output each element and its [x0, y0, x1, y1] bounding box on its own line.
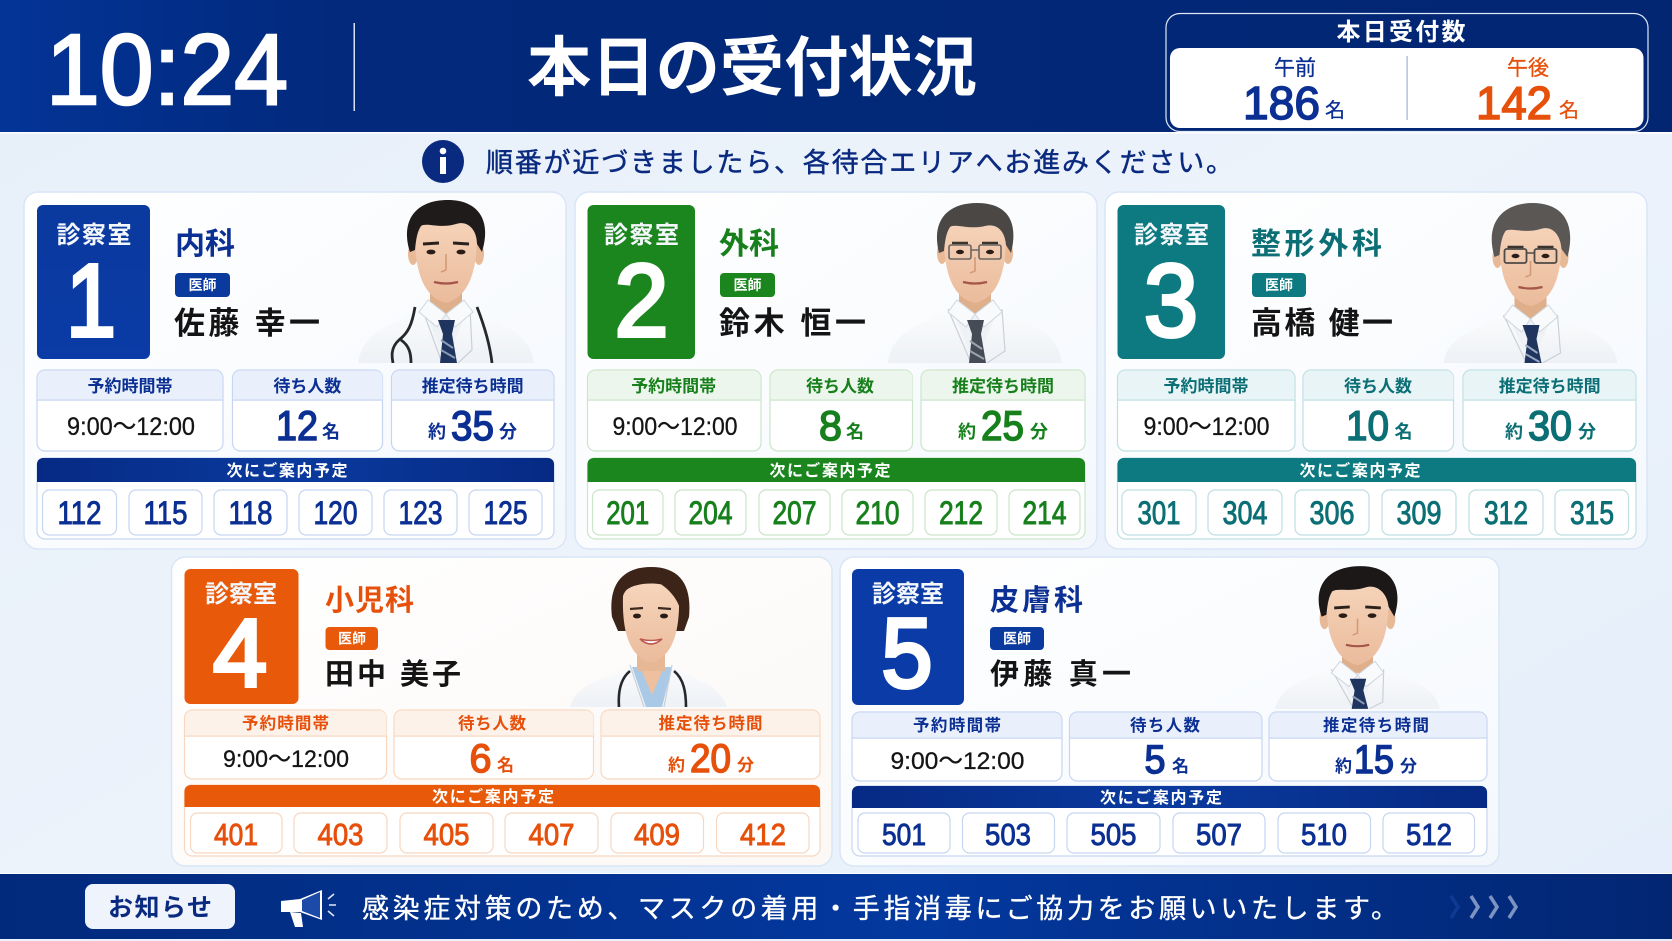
afternoon count: 142: [1476, 77, 1552, 129]
info cell: estimated wait: 分: [499, 422, 517, 442]
icon: information: [422, 140, 464, 183]
info cell: waiting people: 名: [322, 422, 340, 442]
summary heading: 本日受付数: [1336, 19, 1466, 46]
info cell: estimated wait: 約: [1505, 422, 1523, 442]
info cell: estimated wait: 推定待ち時間: [658, 714, 762, 733]
next patients: 407: [528, 817, 574, 852]
info cell: estimated wait: [601, 710, 820, 781]
next patients: 次にご案内予定: [226, 461, 348, 480]
doctor tag: 医師: [734, 277, 762, 293]
info cell: waiting people: 待ち人数: [458, 714, 526, 733]
next patients: [1118, 458, 1636, 539]
info cell: estimated wait: 推定待ち時間: [952, 377, 1054, 396]
info cell: waiting people: [232, 370, 382, 451]
panel: today's reception counts: [1166, 14, 1648, 132]
doctor name: 鈴木 恒一: [719, 306, 866, 341]
next patients: 207: [772, 495, 816, 531]
info cell: waiting people: [770, 370, 912, 451]
afternoon count: 午後: [1507, 57, 1549, 80]
info cell: estimated wait: 約: [668, 756, 685, 775]
info cell: booking time: [588, 370, 761, 451]
panel: room 3 orthopedics: [1105, 192, 1647, 549]
info cell: waiting people: 待ち人数: [1130, 716, 1200, 735]
info cell: waiting people: [1070, 712, 1262, 782]
next patients: [852, 786, 1487, 856]
next patients: [184, 785, 820, 856]
next patients: 304: [1222, 495, 1268, 531]
doctor portrait: [358, 200, 534, 363]
info cell: waiting people: [394, 710, 594, 781]
morning count: 午前: [1274, 57, 1316, 80]
next patients: 204: [688, 495, 732, 531]
info cell: estimated wait: 約: [428, 422, 446, 442]
info cell: estimated wait: 分: [1030, 422, 1048, 442]
clock: 10:24: [46, 14, 288, 126]
room badge: 5: [882, 598, 932, 708]
room badge: 4: [213, 600, 267, 707]
next patients: 120: [314, 495, 358, 531]
next patients: 312: [1484, 495, 1528, 531]
next patients: 214: [1022, 495, 1066, 531]
announcement button: [85, 884, 235, 929]
info cell: waiting people: 名: [497, 756, 514, 775]
next patients: 501: [882, 817, 926, 852]
next patients: 次にご案内予定: [770, 461, 890, 480]
next patients: 次にご案内予定: [1300, 461, 1420, 480]
info cell: booking time: 予約時間帯: [913, 716, 1001, 735]
next patients: 510: [1301, 817, 1347, 852]
info cell: waiting people: 10: [1346, 402, 1389, 449]
info cell: estimated wait: [1269, 712, 1487, 782]
info cell: waiting people: 待ち人数: [806, 377, 874, 396]
next patients: 412: [740, 817, 786, 852]
info cell: booking time: [852, 712, 1062, 781]
info cell: estimated wait: 推定待ち時間: [1323, 716, 1429, 735]
info cell: waiting people: 名: [846, 422, 864, 442]
panel: room 1 internal medicine: [24, 192, 566, 549]
info cell: booking time: 9:00～12:00: [890, 748, 1024, 775]
next patients: 512: [1406, 817, 1452, 852]
info cell: estimated wait: [392, 370, 554, 451]
next patients: 503: [985, 817, 1031, 852]
info cell: waiting people: 名: [1172, 757, 1189, 776]
info cell: estimated wait: 約: [958, 422, 976, 442]
room badge: 診察室: [604, 222, 679, 249]
doctor portrait: [570, 567, 727, 707]
room badge: 2: [614, 243, 668, 358]
morning count: [1243, 57, 1345, 129]
chevrons: [1451, 896, 1516, 918]
doctor name: 田中 美子: [325, 658, 461, 691]
next patients: 405: [424, 817, 470, 852]
doctor name: 伊藤 真一: [990, 658, 1131, 691]
next patients: 201: [606, 495, 649, 531]
department: 外科: [719, 228, 779, 261]
doctor portrait: [1444, 203, 1617, 363]
room badge: [184, 569, 298, 707]
notice text: 順番が近づきましたら、各待合エリアへお進みください。: [486, 148, 1233, 178]
doctor portrait: [1276, 566, 1440, 709]
summary white box: [1170, 48, 1644, 128]
panel: room 4 pediatrics: [172, 557, 832, 866]
icon: megaphone: [281, 890, 336, 927]
info cell: estimated wait: 20: [690, 737, 731, 781]
info cell: estimated wait: [921, 370, 1085, 451]
info cell: booking time: 9:00～12:00: [67, 413, 195, 441]
info cell: booking time: 予約時間帯: [1164, 377, 1248, 396]
doctor tag: [1252, 273, 1306, 297]
info cell: estimated wait: 分: [737, 756, 754, 775]
doctor tag: 医師: [1265, 277, 1293, 293]
announcement button: お知らせ: [108, 894, 212, 922]
department: 内科: [175, 228, 235, 261]
morning count: 186: [1243, 77, 1320, 129]
header band: [0, 0, 1672, 134]
room badge: 診察室: [872, 581, 944, 608]
info cell: booking time: [37, 370, 223, 451]
doctor tag: [990, 627, 1044, 650]
next patients: 507: [1196, 817, 1242, 852]
next patients: 次にご案内予定: [1100, 788, 1222, 807]
doctor tag: 医師: [1003, 630, 1031, 646]
info cell: estimated wait: 分: [1400, 757, 1417, 776]
next patients: 118: [228, 495, 272, 531]
department: 小児科: [325, 584, 414, 617]
info cell: booking time: [184, 710, 386, 779]
info cell: waiting people: [1303, 370, 1454, 451]
info cell: estimated wait: 35: [451, 402, 494, 449]
doctor tag: [720, 273, 775, 297]
afternoon count: 名: [1559, 99, 1579, 122]
next patients: 301: [1138, 495, 1180, 531]
info cell: waiting people: 待ち人数: [1344, 377, 1412, 396]
room badge: 診察室: [1134, 222, 1209, 249]
info cell: estimated wait: 30: [1528, 402, 1572, 449]
next patients: 125: [484, 495, 528, 531]
info cell: waiting people: 6: [470, 737, 492, 781]
info cell: waiting people: 待ち人数: [273, 377, 341, 396]
morning count: 名: [1325, 99, 1345, 122]
info cell: estimated wait: 25: [981, 402, 1024, 449]
next patients: 123: [398, 495, 442, 531]
room badge: 診察室: [205, 581, 277, 608]
panel: room 2 surgery: [575, 192, 1097, 549]
info cell: waiting people: 12: [276, 402, 318, 449]
info cell: booking time: [1118, 370, 1295, 451]
doctor name: 佐藤 幸一: [174, 306, 320, 341]
next patients: 309: [1396, 495, 1442, 531]
panel: room 5 dermatology: [840, 557, 1499, 866]
info cell: booking time: 予約時間帯: [88, 377, 172, 396]
room badge: 診察室: [56, 222, 132, 249]
info cell: booking time: 予約時間帯: [631, 377, 716, 396]
info cell: estimated wait: 分: [1578, 422, 1596, 442]
next patients: 212: [939, 495, 983, 531]
doctor name: 高橋 健一: [1251, 306, 1393, 341]
info cell: estimated wait: 推定待ち時間: [422, 377, 524, 396]
info cell: estimated wait: 15: [1354, 738, 1394, 782]
next patients: [37, 458, 554, 539]
next patients: 315: [1570, 495, 1614, 531]
doctor tag: [175, 273, 230, 297]
room badge: [37, 205, 150, 359]
department: 整形外科: [1251, 228, 1382, 261]
info cell: booking time: 9:00～12:00: [1144, 413, 1270, 441]
next patients: 115: [144, 495, 188, 531]
info cell: estimated wait: [1463, 370, 1636, 451]
next patients: 401: [214, 817, 258, 852]
next patients: 409: [634, 817, 680, 852]
room badge: [1118, 205, 1225, 359]
room badge: [852, 569, 964, 708]
doctor portrait: [888, 203, 1062, 363]
doctor tag: [326, 627, 378, 650]
footer ticker: [0, 873, 1672, 939]
next patients: 505: [1090, 817, 1136, 852]
doctor tag: 医師: [338, 630, 366, 646]
next patients: 306: [1310, 495, 1354, 531]
info cell: estimated wait: 推定待ち時間: [1499, 377, 1601, 396]
department: 皮膚科: [990, 584, 1083, 617]
info cell: estimated wait: 約: [1335, 757, 1352, 776]
notice line: [422, 140, 1233, 183]
header divider: [354, 23, 355, 111]
info cell: waiting people: 名: [1394, 422, 1412, 442]
info cell: booking time: 9:00～12:00: [612, 413, 738, 441]
doctor tag: 医師: [188, 277, 216, 293]
room badge: [588, 205, 695, 359]
next patients: 次にご案内予定: [432, 787, 554, 806]
info cell: booking time: 予約時間帯: [242, 714, 329, 733]
next patients: 112: [58, 495, 102, 531]
title: 本日の受付状況: [527, 31, 977, 104]
room badge: 1: [66, 243, 116, 358]
announcement text: 感染症対策のため、マスクの着用・手指消毒にご協力をお願いいたします。: [362, 894, 1398, 924]
next patients: 210: [856, 495, 900, 531]
room badge: 3: [1144, 243, 1198, 358]
info cell: booking time: 9:00～12:00: [223, 746, 349, 773]
next patients: 403: [318, 817, 364, 852]
next patients: [588, 458, 1085, 539]
info cell: waiting people: 5: [1144, 738, 1166, 782]
info cell: waiting people: 8: [819, 402, 842, 449]
afternoon count: [1476, 57, 1579, 129]
